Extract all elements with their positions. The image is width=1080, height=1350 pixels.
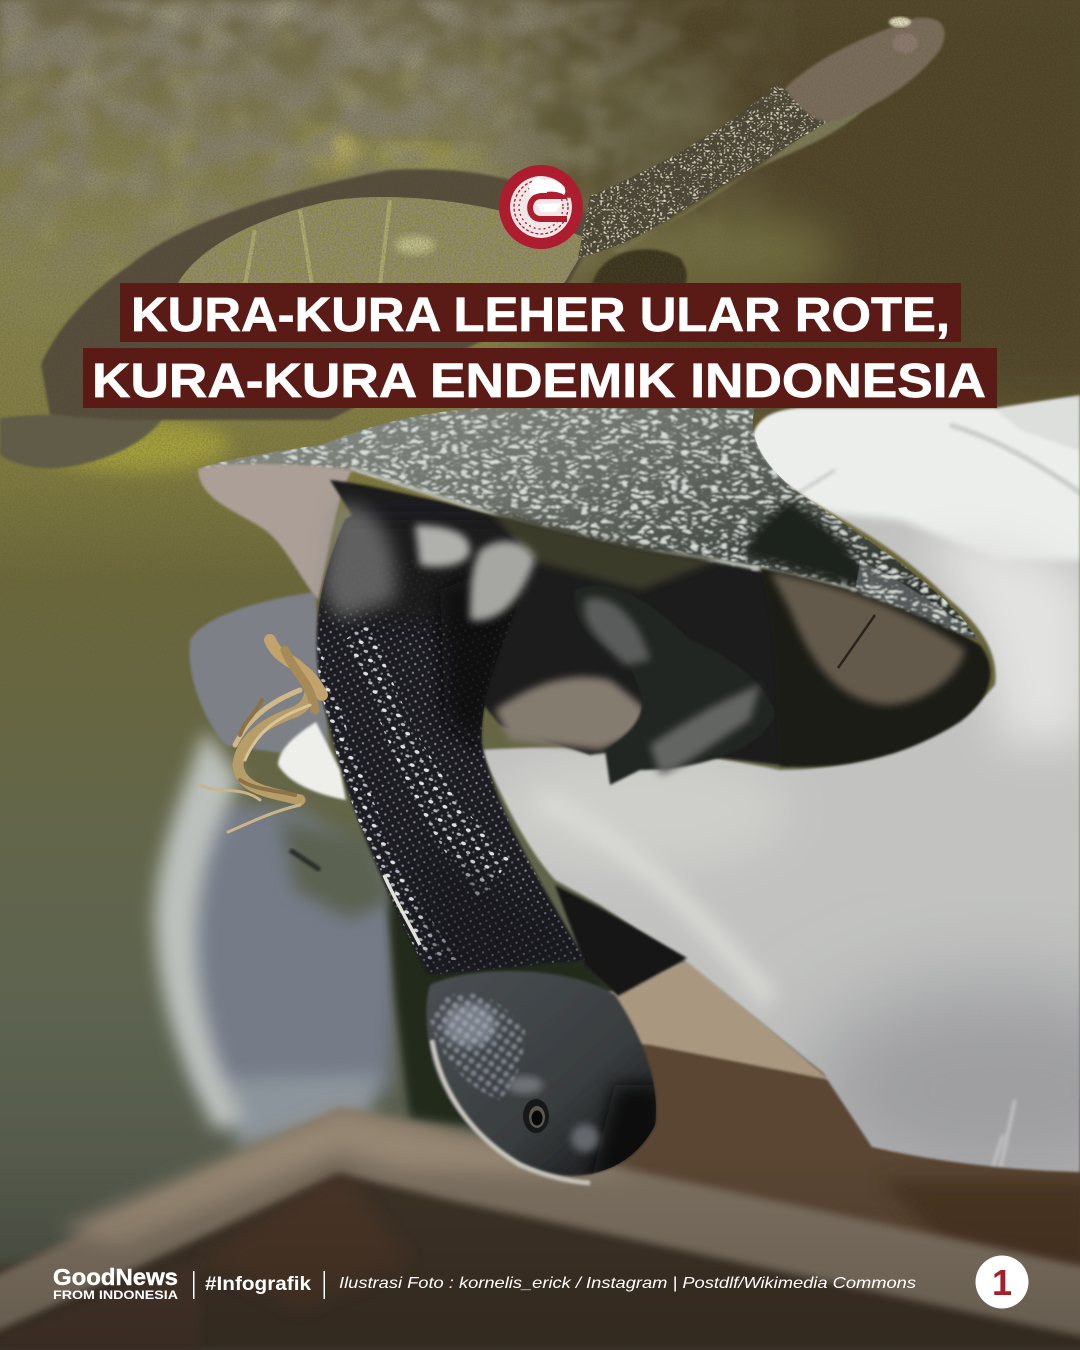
photo credit: Ilustrasi Foto : kornelis_erick / Instagram | Postdlf/Wikimedia Commons <box>339 1275 916 1292</box>
white glove holding turtle <box>470 390 1080 1200</box>
pale throat of swimming turtle <box>612 85 885 252</box>
title line 1: KURA-KURA LEHER ULAR ROTE, <box>131 289 950 342</box>
silver shell scutes at rear <box>855 560 978 640</box>
grey bowl behind hand <box>155 730 620 1150</box>
white tissue <box>278 722 346 800</box>
hind limb of swimming turtle <box>0 414 165 468</box>
pale lower jaw edge <box>432 1040 590 1183</box>
carapace of swimming turtle <box>41 169 600 420</box>
snout highlight <box>571 1124 599 1152</box>
shell underside rim <box>350 468 855 590</box>
title line 2: KURA-KURA ENDEMIK INDONESIA <box>92 355 986 408</box>
page number badge <box>976 1256 1028 1308</box>
second gloved finger behind <box>189 592 330 760</box>
title bar line 2 <box>83 348 997 408</box>
inner corner shade <box>200 1173 410 1310</box>
dark shell patch by glove <box>745 500 870 590</box>
logo eagle head <box>529 176 565 196</box>
head <box>426 971 656 1176</box>
brand: GoodNews from Indonesia: GoodNews <box>53 1264 178 1290</box>
front flipper of swimming turtle <box>592 249 687 285</box>
footer <box>53 1256 1028 1308</box>
page number badge: 1 <box>992 1262 1012 1303</box>
algae strands on shell <box>200 640 322 832</box>
rear leg <box>574 586 775 785</box>
lower box body <box>0 1170 1080 1350</box>
brow highlight <box>507 1076 543 1094</box>
pale underside front <box>198 464 352 600</box>
bottom darkening gradient <box>0 1150 1080 1350</box>
head of swimming turtle <box>785 18 945 122</box>
hashtag: #Infografik <box>205 1274 311 1295</box>
eye <box>523 1099 549 1133</box>
plastron belly <box>495 677 660 750</box>
carapace <box>198 408 978 640</box>
film grain over upper background <box>0 0 1080 559</box>
neck of swimming turtle <box>578 85 830 258</box>
glove fold lines <box>540 800 770 1000</box>
glove fingers <box>740 400 1080 560</box>
brand: GoodNews from Indonesia: FROM INDONESIA <box>53 1288 178 1302</box>
dark shadow beside neck <box>555 885 687 996</box>
title: highlighted two-line headline <box>83 283 997 408</box>
long neck <box>317 499 585 975</box>
brand: GoodNews from Indonesia <box>53 1264 178 1302</box>
light tan board <box>590 960 830 1080</box>
back wall of box <box>570 1030 1080 1300</box>
carapace yellow scutes <box>175 197 590 290</box>
dark interior and body <box>330 480 850 766</box>
rote snake-necked turtle <box>198 408 990 1185</box>
lighter skin patches <box>415 525 470 567</box>
title bar line 1 <box>120 283 961 342</box>
soft skin at neck base <box>322 504 396 620</box>
wooden box <box>0 960 1080 1350</box>
logo: garuda circular emblem <box>499 165 583 249</box>
upper turtle swimming <box>0 17 945 468</box>
plastron rim <box>760 568 990 767</box>
pale edge of neck <box>384 875 420 945</box>
front board <box>0 1108 1080 1338</box>
glove base <box>470 390 1080 1180</box>
